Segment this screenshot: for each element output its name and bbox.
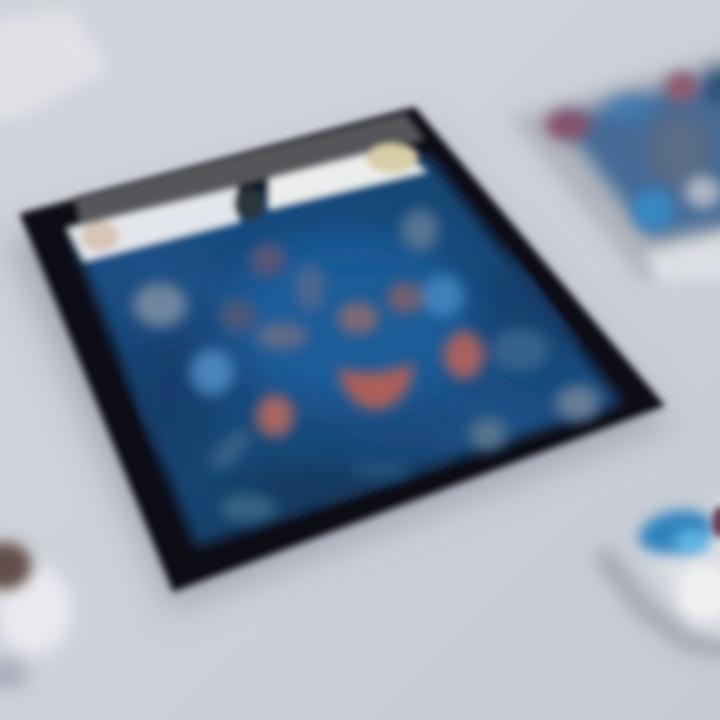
screen header bar [66,143,428,262]
icon: pale lower right [556,385,600,421]
screen dark pocket right [490,240,590,360]
phone shadow [600,552,720,650]
second device top right [510,48,720,285]
red icon left [545,109,591,141]
icon: pale left [133,283,187,327]
screen bright centre [230,230,470,410]
blue icon [632,189,674,231]
cup white body [0,564,72,656]
camera notch [235,188,265,220]
dark corner [708,67,720,103]
grey right [648,110,712,190]
cup shadow [0,660,28,688]
cup bottom left [0,542,72,688]
tablet top edge in grey [75,113,425,226]
phone bright highlight [675,530,709,554]
object: white paper top left [0,8,112,122]
icon: coral smile blob [338,362,414,410]
icon: faint centre top [294,264,326,312]
icon: bright blue left [190,349,234,395]
phone dark accent [712,506,720,538]
phone body [636,495,720,640]
phone white area [678,564,720,620]
icon: faint streak bottom [350,462,410,478]
icon: pale top right [401,209,439,251]
bright blue top [606,97,654,119]
device screen [560,68,720,238]
tablet drop shadow [5,125,672,612]
pale icon [685,176,720,208]
icon: faint streak left [203,423,257,477]
screen icons [133,209,600,522]
icon: blue right [422,275,464,317]
icon: mauve centre [256,322,308,350]
icon: pale bottom [469,418,507,450]
screen dark pocket left [125,330,215,450]
icon: coral circle right [444,331,484,379]
device lighting [606,67,720,190]
screen dark pocket bottom [230,465,490,515]
device body with grey frame [510,48,720,280]
device bottom white strip [645,232,720,285]
coffee dark [0,542,32,590]
icon: coral circle lower [256,395,294,437]
icon: faint bottom left [220,494,276,522]
red icon right [665,72,699,102]
icon: coral centre right [387,282,423,314]
phone blue screen [634,504,718,560]
icon: red top [250,243,286,277]
icon: faint right [490,328,550,372]
tablet body [22,109,662,590]
device icons [545,72,720,231]
tablet screen [72,155,622,547]
screen lighting inside clip [125,230,590,515]
icon: mauve left [220,299,256,333]
main tablet [22,109,662,590]
icon: coral centre left [337,302,379,334]
phone bottom right [600,495,720,650]
